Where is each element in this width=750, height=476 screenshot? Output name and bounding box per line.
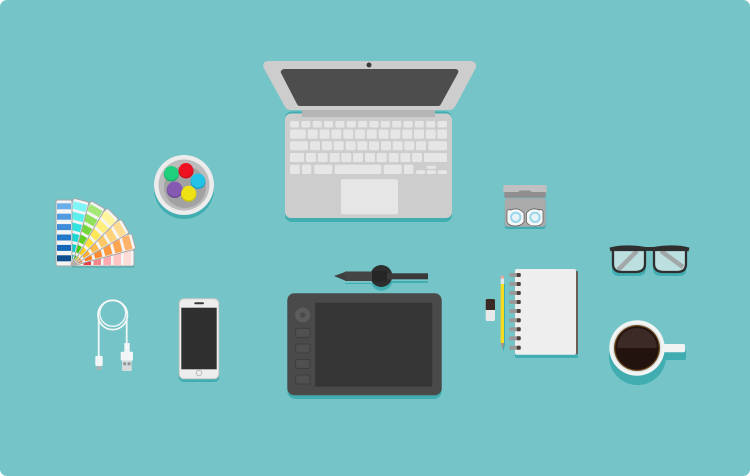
purple paint xyxy=(167,182,183,198)
cup rim xyxy=(609,320,665,376)
pen holder xyxy=(370,265,392,287)
spiral binding xyxy=(509,273,521,350)
tablet shadow xyxy=(287,296,442,399)
phone body xyxy=(179,298,219,379)
pen shadow xyxy=(345,281,428,291)
notebook cover xyxy=(573,271,578,354)
phone shadow xyxy=(179,300,219,382)
lenses xyxy=(613,250,645,272)
usb cable xyxy=(95,300,133,371)
pencil tip xyxy=(501,343,504,350)
smartphone xyxy=(179,298,219,382)
pencil eraser tip xyxy=(501,276,504,279)
fan shadow xyxy=(72,266,134,268)
light orange blade xyxy=(64,219,129,266)
case base xyxy=(505,198,546,227)
pen nib xyxy=(334,272,345,280)
red paint xyxy=(178,163,194,178)
eraser sleeve xyxy=(486,299,495,310)
pencil shaft xyxy=(501,284,504,343)
webcam xyxy=(366,62,372,68)
tablet buttons xyxy=(296,328,310,384)
case shadow xyxy=(505,200,546,229)
tablet body xyxy=(287,293,442,395)
pencil xyxy=(501,276,505,352)
paint bowl xyxy=(154,155,214,219)
keyboard xyxy=(290,121,447,174)
case lid xyxy=(503,185,547,192)
micro connector xyxy=(95,354,103,370)
contact lens case xyxy=(503,185,547,229)
laptop lid xyxy=(263,61,476,110)
touchpad xyxy=(341,179,398,214)
cup handle xyxy=(660,344,685,352)
phone speaker xyxy=(194,302,204,304)
right lens xyxy=(526,209,543,226)
pen end xyxy=(387,273,428,279)
yellow paint xyxy=(181,186,196,202)
cup shadow xyxy=(609,328,666,385)
bowl inner xyxy=(158,160,210,210)
dial xyxy=(295,308,310,322)
phone screen xyxy=(181,308,217,369)
coffee edge xyxy=(614,325,660,371)
active area xyxy=(315,303,432,387)
notebook xyxy=(509,269,578,358)
coffee cup xyxy=(609,320,686,385)
eraser body xyxy=(486,299,495,321)
graphics tablet xyxy=(287,293,442,399)
green paint xyxy=(164,166,179,182)
pink blade xyxy=(72,250,134,266)
blue blade xyxy=(56,200,72,266)
orange blade xyxy=(68,233,136,266)
cable loops xyxy=(98,300,127,330)
pen body xyxy=(345,272,372,281)
fan pivot xyxy=(70,262,76,266)
laptop xyxy=(263,61,476,222)
yellow blade xyxy=(61,208,119,266)
frame xyxy=(613,250,686,272)
laptop screen xyxy=(281,69,458,106)
bowl shadow xyxy=(154,159,214,219)
bowl rim xyxy=(154,155,214,215)
cable shadow xyxy=(99,320,127,330)
drawing pen xyxy=(334,265,428,291)
laptop base shadow xyxy=(285,112,452,222)
usb connector xyxy=(121,343,133,371)
eraser xyxy=(486,299,495,321)
pencil shadow xyxy=(503,284,505,352)
hinge xyxy=(302,110,435,117)
cable wires xyxy=(99,318,127,356)
home button xyxy=(196,370,202,376)
notebook shadow xyxy=(515,272,578,358)
left lens xyxy=(507,209,524,226)
temple arms xyxy=(618,251,637,270)
notebook paper xyxy=(515,269,576,355)
glasses xyxy=(610,247,689,276)
green blade xyxy=(58,201,105,266)
coffee highlight xyxy=(617,328,657,348)
coffee xyxy=(615,326,659,370)
glasses shadow xyxy=(612,262,686,276)
colour swatch fan xyxy=(56,198,136,268)
laptop body xyxy=(285,114,452,218)
pencil ferrule xyxy=(501,278,504,284)
cyan blade xyxy=(57,198,89,266)
cyan paint xyxy=(190,174,206,189)
